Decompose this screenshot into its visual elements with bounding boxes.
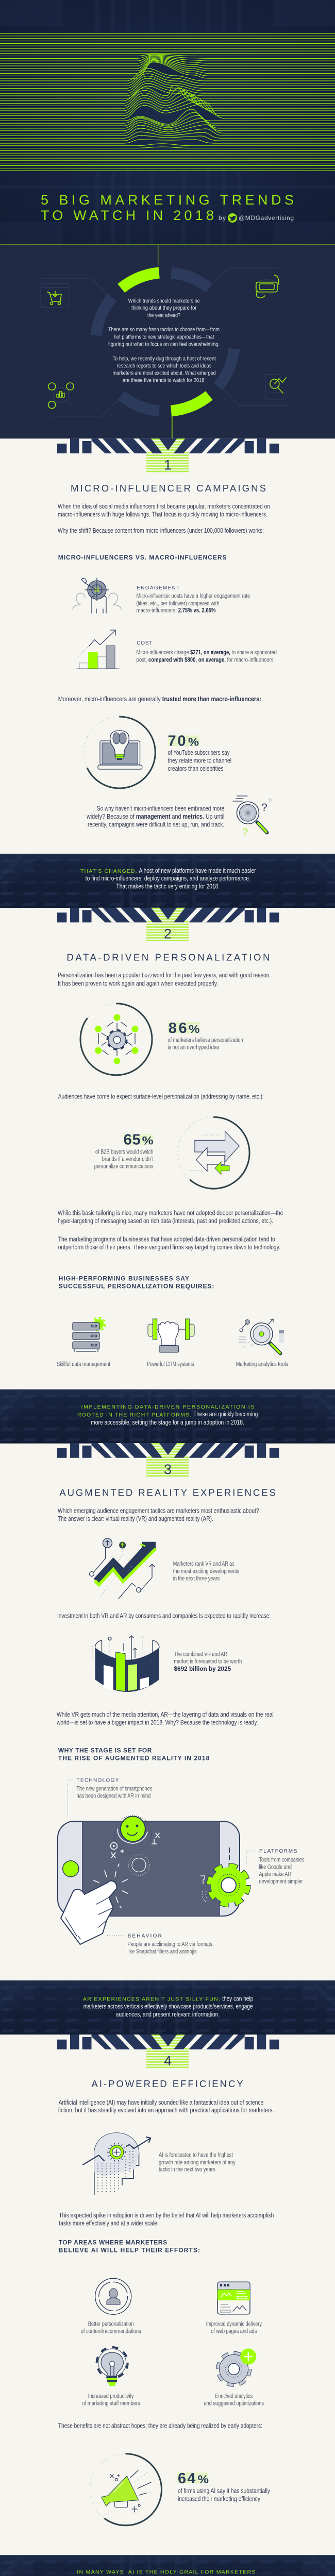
icon: magnifier with gear and question marks <box>233 796 272 838</box>
cost text: COST <box>137 640 152 646</box>
callout band 4 <box>0 2555 335 2576</box>
AR sparkles <box>94 1833 210 1908</box>
section 3 divider and number: 3 <box>164 1462 172 1477</box>
icon: analytics magnifier <box>239 1319 284 1353</box>
section 2 divider and number <box>57 908 279 942</box>
intro text: Which trends should marketers be <box>128 298 200 304</box>
subheading: top areas: BELIEVE AI WILL HELP THEIR EFFORTS: <box>59 2247 200 2254</box>
intro copy 4 <box>58 2099 274 2114</box>
AI forecast text <box>159 2153 236 2173</box>
label: analytics tools: Marketing analytics tools <box>236 1362 288 1368</box>
intro text <box>108 298 220 384</box>
engagement text: macro-influencers: 2.75% vs. 2.65% <box>136 608 215 614</box>
icon: AI head with arrow <box>83 2133 150 2195</box>
heading: augmented reality: AUGMENTED REALITY EXPERIENCES <box>59 1487 276 1498</box>
stat: 64 percent: % <box>198 2473 209 2486</box>
VR AR developments text: the most exciting developments <box>173 1568 239 1574</box>
icon: report with magnifier <box>262 375 287 399</box>
why not adopted text: So why haven’t micro-influencers been embraced more <box>97 805 224 812</box>
AI forecast text: AI is forecasted to have the highest <box>159 2153 233 2159</box>
big wave-line numeral 5 <box>0 33 335 171</box>
VR AR developments text: Marketers rank VR and AR as <box>173 1561 234 1567</box>
icon: laptop with bulb <box>98 731 142 769</box>
behavior label: BEHAVIOR <box>128 1933 162 1939</box>
stat: 86 percent <box>168 1020 243 1051</box>
icon: magnifier with gear and question marks: ? <box>268 797 272 805</box>
technology label: The new generation of smartphones <box>76 1786 152 1792</box>
spike in adoption copy: tasks more effectively and at a wider scale. <box>59 2219 159 2227</box>
why not adopted text: widely? Because of management and metrics. Up until <box>86 813 224 820</box>
section 3 divider and number <box>57 1443 279 1477</box>
twitter byline <box>219 213 294 223</box>
label: data management: Skillful data management <box>57 1362 111 1368</box>
engagement text: ENGAGEMENT <box>137 585 179 591</box>
label: dynamic delivery <box>206 2321 262 2335</box>
benefits text: These benefits are not abstract hopes; they are already being realized by early adopters: <box>58 2422 262 2429</box>
stat: 70 percent: they relate more to channel <box>168 757 231 765</box>
market forecast text: market is forecasted to be worth <box>174 1659 242 1665</box>
stat: 70 percent: 70 <box>168 733 186 750</box>
behavior label: People are acclimating to AR via formats, <box>128 1941 213 1947</box>
icon: dynamic browser <box>217 2282 250 2314</box>
icon: magnifier with gear and question marks: ? <box>261 802 267 814</box>
intro text: the year ahead? <box>147 312 180 318</box>
intro text: figuring out what to focus on can feel overwhelming. <box>108 341 220 347</box>
stat: 70 percent: creators than celebrities <box>168 765 224 772</box>
title <box>41 192 294 223</box>
icon: personalization person in ring <box>95 2278 131 2314</box>
callout band 3: they can help <box>222 1995 253 2002</box>
stat: 70 percent: of YouTube subscribers say <box>168 749 230 756</box>
technology label <box>68 1777 152 1818</box>
why not adopted text: recently, campaigns were difficult to set up, run, and track. <box>88 821 224 828</box>
intro text: To help, we recently dug through a host of recent <box>112 356 216 362</box>
engagement text <box>136 585 250 614</box>
section 1 divider and number: 1 <box>164 457 172 473</box>
trust statement: Moreover, micro-influencers are generally trusted more than macro-influencers: <box>58 696 261 703</box>
panel: intro <box>0 244 335 439</box>
stat: 86 percent: 86 <box>169 1020 187 1037</box>
platforms label: Tools from companies <box>259 1857 305 1863</box>
audience text: Audiences have come to expect surface-level personalization (addressing by name, etc.): <box>58 1093 264 1100</box>
icon: gear lightbulb <box>97 2347 128 2386</box>
label: personalization: of content/recommendations <box>81 2329 141 2335</box>
intro copy 1: Why the shift? Because content from micro-influencers (under 100,000 followers) works: <box>58 527 264 534</box>
icon: megaphone <box>101 2470 152 2512</box>
subheading: top areas: TOP AREAS WHERE MARKETERS <box>59 2239 167 2246</box>
investment text: Investment in both VR and AR by consumers and companies is expected to rapidly increase: <box>57 1613 271 1620</box>
technology label: has been designed with AR in mind <box>76 1793 150 1799</box>
icon: cost bars <box>77 630 119 669</box>
stat: 70 percent <box>168 733 231 772</box>
heading: micro-influencer campaigns: MICRO-INFLUENCER CAMPAIGNS <box>71 483 266 494</box>
label: personalization <box>81 2321 141 2335</box>
callout band 3 <box>0 1980 335 2035</box>
intro copy 1: When the idea of social media influencers first became popular, marketers concentrated on <box>58 503 270 510</box>
chart: 65 percent ring <box>178 1117 249 1189</box>
stat: 70 percent: % <box>188 736 199 749</box>
stat: 65 percent: personalize communications <box>94 1163 154 1170</box>
callout band 2 <box>0 1389 335 1444</box>
intro text: There are so many fresh tactics to choose from—from <box>108 327 220 333</box>
market forecast text <box>174 1651 242 1672</box>
stat: 64 percent: increased their marketing efficiency <box>178 2495 261 2502</box>
label: CRM: Powerful CRM systems <box>147 1362 194 1368</box>
section 4 divider and number: 4 <box>164 2053 172 2069</box>
callout band 1: A host of new platforms have made it much easier <box>139 867 256 874</box>
intro copy 3: Which emerging audience engagement tactics are marketers most enthusiastic about? <box>58 1507 259 1514</box>
platforms label: development simpler <box>259 1879 303 1885</box>
smiley <box>114 1816 152 1853</box>
icon: shopping cart <box>41 284 69 308</box>
icon: swap arrows <box>190 1131 239 1175</box>
label: enriched analytics: Enriched analytics <box>215 2393 253 2399</box>
engagement text: (likes, etc., per follower) compared with <box>136 601 220 607</box>
label: productivity: Increased productivity <box>88 2393 134 2399</box>
chart: 70 percent ring <box>83 717 155 788</box>
stat: 86 percent: of marketers believe personalization <box>168 1038 243 1044</box>
VR vs AR copy: While VR gets much of the media attention, AR—the layering of data and visuals on the real <box>57 1711 274 1718</box>
VR AR developments text: in the next three years <box>173 1575 220 1582</box>
label: personalization: Better personalization <box>88 2321 134 2328</box>
callout band 2: more accessible, setting the stage for a jump in adoption in 2018. <box>91 1419 244 1426</box>
pointing hand <box>61 1881 117 1944</box>
market forecast text: The combined VR and AR <box>174 1651 227 1657</box>
cost text: post, compared with $800, on average, for macro-influencers <box>136 657 274 664</box>
callout band 4: IN MANY WAYS, AI IS THE HOLY GRAIL FOR MARKETERS. <box>77 2569 258 2575</box>
label: enriched analytics: and suggested optimizations <box>204 2401 264 2407</box>
stat: 64 percent: of firms using AI say it has substantially <box>178 2487 271 2495</box>
callout band 3: marketers across verticals effectively showcase products/services, engage <box>83 2003 253 2010</box>
callout band 2: IMPLEMENTING DATA-DRIVEN PERSONALIZATION IS <box>81 1404 254 1410</box>
subheading: micro vs macro: MICRO-INFLUENCERS VS. MACRO-INFLUENCERS <box>58 554 227 561</box>
behavior label <box>107 1933 213 1955</box>
platforms label: like Google and <box>259 1865 292 1871</box>
label: dynamic delivery: of web pages and ads <box>211 2329 257 2335</box>
icon: zigzag growth arrow <box>90 1538 156 1599</box>
icon: gear network <box>95 1014 138 1064</box>
icon: magnifier with gear and question marks: ? <box>242 827 248 838</box>
VR vs AR copy: world—is set to have a bigger impact in 2018. Why? Because the technology is ready. <box>56 1719 258 1726</box>
label: enriched analytics <box>204 2393 264 2407</box>
icon: data servers <box>73 1318 105 1352</box>
section 4 divider and number <box>57 2035 279 2069</box>
illustration: AR smartphone <box>58 1816 248 1944</box>
title: TO WATCH IN 2018 <box>41 208 214 223</box>
subheading: rise of AR: WHY THE STAGE IS SET FOR <box>58 1747 152 1754</box>
chart: 64 percent ring <box>90 2454 162 2526</box>
AI forecast text: growth rate among marketers of any <box>159 2160 236 2166</box>
subheading: top areas <box>59 2239 200 2254</box>
platforms label: Apple make AR <box>259 1872 291 1878</box>
hero header <box>0 0 335 245</box>
callout band 3: audiences, and present relevant information. <box>116 2011 220 2018</box>
stat: 86 percent: % <box>189 1023 200 1036</box>
subheading: rise of AR <box>58 1747 210 1761</box>
stat: 64 percent: 64 <box>178 2470 195 2487</box>
icon: dumbbell fist <box>148 1319 194 1352</box>
intro text: thinking about they prepare for <box>131 305 197 311</box>
spike in adoption copy: This expected spike in adoption is driven by the belief that AI will help marketers accomplish <box>59 2212 274 2219</box>
cost text: Micro-influencers charge $271, on average, to share a sponsored <box>136 650 277 656</box>
intro text: research reports to see which tools and ideas <box>117 363 212 369</box>
platforms label <box>246 1849 305 1885</box>
intro copy 3 <box>58 1507 259 1522</box>
callout band 3: AR EXPERIENCES AREN’T JUST SILLY FUN; <box>83 1996 220 2002</box>
section 1 divider and number <box>57 438 279 473</box>
icon: gear with plus <box>219 2348 256 2384</box>
spike in adoption copy <box>59 2212 274 2227</box>
VR AR developments text <box>173 1561 239 1582</box>
behavior label: like Snapchat filters and animojis <box>128 1949 197 1955</box>
stat: 65 percent: of B2B buyers would switch <box>95 1149 153 1156</box>
callout band 1 <box>0 854 335 908</box>
gear <box>209 1866 248 1904</box>
label: productivity: of marketing staff members <box>82 2401 140 2407</box>
twitter byline: @MDGadvertising <box>239 214 294 222</box>
subheading: requirements: SUCCESSFUL PERSONALIZATION REQUIRES: <box>59 1283 214 1290</box>
AI forecast text: tactic in the next two years <box>159 2167 215 2173</box>
tailoring copy: The marketing programs of businesses that have adopted data-driven personalization tend to <box>58 1235 275 1243</box>
label: dynamic delivery: Improved dynamic delivery <box>206 2321 262 2328</box>
icon: VR goggles <box>255 275 279 298</box>
intro copy 2 <box>58 972 271 987</box>
intro copy 2: Personalization has been a popular buzzword for the past few years, and with good reason. <box>58 972 271 979</box>
engagement text: Micro-influencer posts have a higher engagement rate <box>136 594 250 600</box>
twitter byline: by <box>219 214 226 222</box>
intro copy 2: It has been proven to work again and again when executed properly. <box>58 980 218 987</box>
market forecast text: $692 billion by 2025 <box>174 1666 231 1672</box>
intro text: are these five trends to watch for 2018: <box>123 378 206 384</box>
stat: 65 percent <box>94 1132 154 1170</box>
intro text: marketers are most excited about. What emerged <box>112 370 216 377</box>
callout band 1: THAT’S CHANGED. <box>80 868 137 874</box>
technology label: TECHNOLOGY <box>76 1777 119 1783</box>
intro copy 4: fiction, but it has steadily evolved into an approach with practical applications for marketers. <box>58 2107 274 2114</box>
intro copy 4: Artificial intelligence (AI) may have initially sounded like a fantastical idea out of science <box>59 2099 263 2106</box>
ring connectors <box>41 268 290 416</box>
tailoring copy <box>58 1209 283 1251</box>
chart: 86 percent ring <box>80 1004 152 1075</box>
callout band 1: That makes the tactic very enticing for 2018. <box>116 883 220 890</box>
intro text: hot platforms to new strategic approaches—that <box>114 334 214 341</box>
VR vs AR copy <box>56 1711 274 1726</box>
stat: 65 percent: % <box>142 1134 154 1147</box>
why not adopted text <box>86 805 224 828</box>
callout band 2: These are quickly becoming <box>193 1411 258 1418</box>
stat: 65 percent: 65 <box>124 1132 141 1148</box>
stat: 65 percent: brands if a vendor didn’t <box>102 1156 154 1162</box>
heading: AI-powered efficiency: AI-POWERED EFFICIENCY <box>91 2078 243 2089</box>
tailoring copy: hyper-targeting of messaging based on rich data (interests, past and predicted actions, etc.). <box>58 1217 273 1225</box>
ring segments <box>68 244 263 439</box>
title: 5 BIG MARKETING TRENDS <box>41 192 294 208</box>
tailoring copy: While this basic tailoring is nice, many marketers have not adopted deeper personalization—the <box>58 1209 283 1216</box>
subheading: requirements <box>59 1275 214 1290</box>
intro copy 3: The answer is clear: virtual reality (VR) and augmented reality (AR). <box>58 1515 213 1522</box>
cost text <box>136 640 277 664</box>
subheading: rise of AR: THE RISE OF AUGMENTED REALITY IN 2018 <box>58 1754 210 1761</box>
subheading: requirements: HIGH-PERFORMING BUSINESSES SAY <box>59 1275 189 1282</box>
section 2 divider and number: 2 <box>164 926 172 942</box>
tailoring copy: outperform those of their peers. These vanguard firms say targeting comes down to technology. <box>58 1244 280 1251</box>
intro copy 1: macro-influencers with huge followings. That focus is quickly moving to micro-influencers. <box>58 511 267 518</box>
intro copy 1 <box>58 503 270 534</box>
callout band 1: to find micro-influencers, deploy campaigns, and analyze performance. <box>86 875 250 882</box>
label: productivity <box>82 2393 140 2407</box>
chart: cylinder bars <box>93 1636 159 1692</box>
callout band 2: ROOTED IN THE RIGHT PLATFORMS. <box>77 1412 191 1418</box>
icon: users and analytics <box>48 383 74 409</box>
stat: 86 percent: is not an overhyped idea <box>168 1045 219 1051</box>
heading: data-driven personalization: DATA-DRIVEN PERSONALIZATION <box>66 952 270 962</box>
stat: 64 percent <box>177 2470 271 2502</box>
icon: engagement target <box>73 578 121 613</box>
platforms label: PLATFORMS <box>259 1849 297 1854</box>
